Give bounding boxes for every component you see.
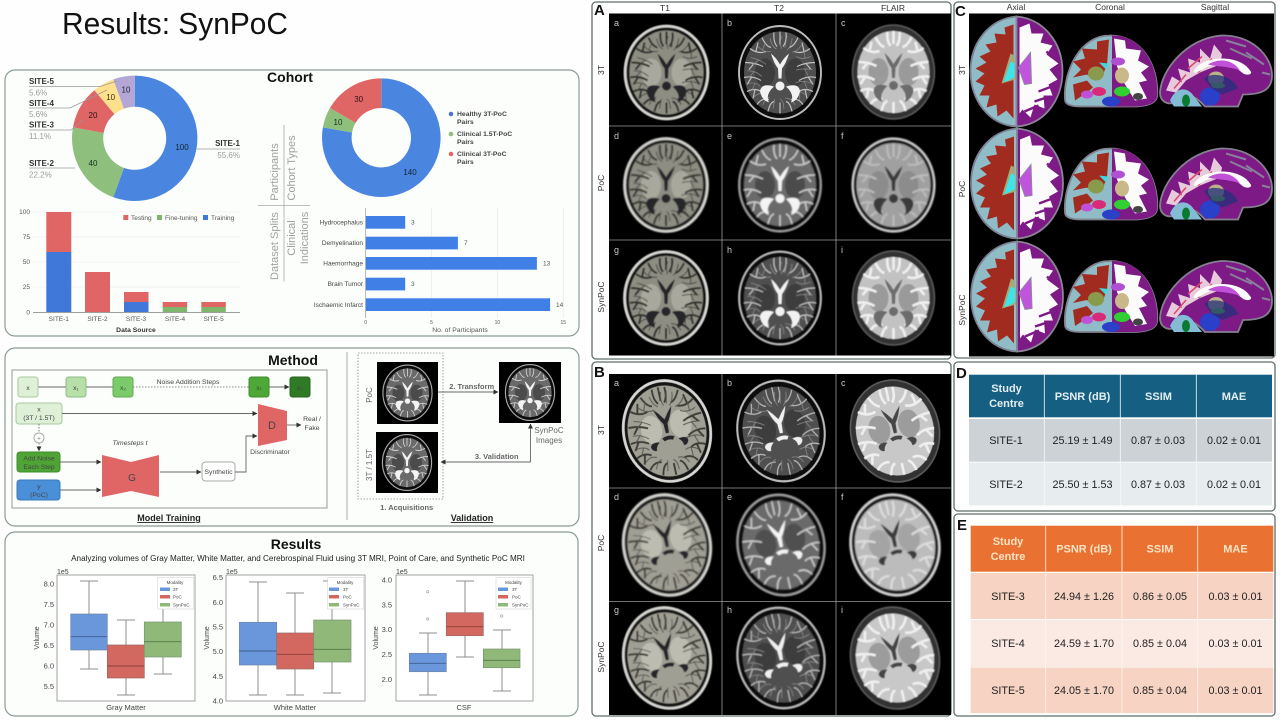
row headers xyxy=(596,425,606,673)
box plot: gray matter: Volume xyxy=(34,626,41,650)
box plot: white matter: 1e5 xyxy=(226,569,238,576)
stacked bar chart: data source: 50 xyxy=(23,259,30,266)
mri cell h: h xyxy=(727,605,732,615)
box plot: white matter: White Matter xyxy=(274,703,317,712)
generator: G xyxy=(128,473,136,484)
panel C: segmentation grid xyxy=(954,2,1275,358)
donut labels: data source: 5.6% xyxy=(29,88,47,98)
mri cell b xyxy=(727,18,821,119)
stacked bar chart: data source: SITE-4 xyxy=(165,316,185,323)
legend: Modality xyxy=(337,580,354,585)
noise addition steps: xₜ xyxy=(256,385,262,392)
stacked bar chart: data source: SITE-5 xyxy=(203,316,224,323)
row SITE-2: 0.02 ± 0.01 xyxy=(1207,479,1261,491)
column headers xyxy=(660,3,905,13)
heading: method: Method xyxy=(268,352,318,368)
mri cell h xyxy=(727,599,834,717)
row headers: SynPoC xyxy=(596,281,606,313)
legend xyxy=(328,578,364,609)
inputs: Each Step xyxy=(23,464,55,471)
box plot: white matter xyxy=(204,569,365,712)
segmentation row: 3T xyxy=(970,16,1272,126)
diagram: validation: SynPoC xyxy=(534,426,564,435)
row headers xyxy=(596,65,606,313)
row headers: 3T xyxy=(957,65,967,75)
legend: 3T xyxy=(173,587,179,592)
row headers xyxy=(957,65,967,326)
subtitle: Analyzing volumes of Gray Matter, White Matter, and Cerebrospinal Fluid using 3T MRI, Point of Care, and Synthetic PoC MRI xyxy=(71,554,525,563)
heading: model training: Model Training xyxy=(137,513,201,523)
donut chart: cohort types xyxy=(322,78,441,197)
box plot: gray matter: 7.0 xyxy=(44,620,54,630)
row SITE-3: 0.03 ± 0.01 xyxy=(1209,591,1262,603)
stacked bar chart: data source: SITE-1 xyxy=(49,316,69,323)
mri cell e xyxy=(727,131,821,232)
discriminator: Real / xyxy=(303,416,321,423)
row SITE-2 xyxy=(969,462,1272,506)
mri cell d: d xyxy=(614,131,619,141)
row headers: SynPoC xyxy=(596,641,606,673)
table header: Centre xyxy=(991,551,1025,563)
panel letter D: D xyxy=(956,365,967,382)
discriminator: Fake xyxy=(304,425,320,432)
donut labels and legend: cohort types: 30 xyxy=(354,95,364,104)
box plot: CSF: 4.0 xyxy=(382,576,392,584)
noise addition steps: x₂ xyxy=(120,385,126,392)
noise addition steps xyxy=(18,377,310,397)
table header: MAE xyxy=(1222,391,1246,403)
table header: SSIM xyxy=(1145,391,1172,403)
diagram: model training xyxy=(12,370,327,508)
inputs: y xyxy=(37,484,41,490)
mri cell f xyxy=(841,131,934,232)
inputs: (3T / 1.5T) xyxy=(23,415,55,422)
panel letter A: A xyxy=(594,2,605,19)
bar chart: clinical indications: 15 xyxy=(561,320,566,326)
bar chart: clinical indications: Brain Tumor xyxy=(328,281,364,288)
box plot: white matter: 4.5 xyxy=(213,672,223,681)
noise addition steps: x xyxy=(297,385,300,392)
panel letter C: C xyxy=(955,3,966,20)
donut labels and legend: cohort types: Pairs xyxy=(457,139,474,146)
panel letter B: B xyxy=(594,364,605,381)
side labels: participants and splits: Dataset Splits xyxy=(269,212,281,280)
box plot: white matter: 5.5 xyxy=(213,622,223,632)
panel: results xyxy=(5,532,578,716)
bar chart: clinical indications: Ischaemic Infarct xyxy=(314,302,363,309)
mri cell b xyxy=(727,372,834,490)
row SITE-2: 25.50 ± 1.53 xyxy=(1053,479,1112,491)
mri cell a: a xyxy=(614,378,619,388)
donut labels and legend: cohort types: Pairs xyxy=(457,159,474,166)
legend: PoC xyxy=(343,594,353,600)
noise addition steps: x₁ xyxy=(73,385,80,392)
table header: MAE xyxy=(1223,544,1248,556)
box plot: gray matter: Gray Matter xyxy=(106,703,146,712)
row SITE-5: 0.03 ± 0.01 xyxy=(1209,685,1262,697)
row headers: 3T xyxy=(596,425,606,435)
box plot: CSF xyxy=(373,569,533,712)
panel letter E: E xyxy=(957,517,967,534)
segmentation row: PoC xyxy=(971,128,1272,238)
bar chart: clinical indications: 5 xyxy=(430,320,433,326)
mri cell g xyxy=(614,599,720,717)
legend: splits xyxy=(123,215,235,222)
box plot: gray matter: 1e5 xyxy=(57,569,69,576)
mri cell c: c xyxy=(841,18,846,28)
legend: 3T xyxy=(343,587,349,592)
panel: cohort xyxy=(5,69,579,336)
discriminator xyxy=(62,404,321,472)
box plot: gray matter: 5.5 xyxy=(44,682,54,691)
legend: 3T xyxy=(512,587,518,592)
row headers: PoC xyxy=(957,181,967,197)
stacked bar chart: data source: 75 xyxy=(23,234,30,241)
row SITE-4: 24.59 ± 1.70 xyxy=(1054,638,1114,650)
row SITE-1 xyxy=(969,419,1272,462)
legend: splits: Testing xyxy=(131,215,152,222)
donut labels: data source: 20 xyxy=(89,111,98,120)
row SITE-1: SITE-1 xyxy=(989,435,1023,447)
panel: method xyxy=(5,348,579,526)
bar chart: clinical indications: No. of Participants xyxy=(432,327,488,334)
row SITE-2: 0.87 ± 0.03 xyxy=(1131,479,1185,491)
column headers: FLAIR xyxy=(881,3,905,13)
legend: SynPoC xyxy=(512,602,529,608)
mri cell i: i xyxy=(841,605,843,615)
donut labels: data source: 5.6% xyxy=(29,110,47,119)
row SITE-5 xyxy=(971,668,1273,713)
row headers: PoC xyxy=(596,535,606,551)
donut labels: data source: 10 xyxy=(122,86,131,94)
legend: Modality xyxy=(505,580,523,585)
box plot: CSF: Volume xyxy=(373,626,380,650)
mri cell h xyxy=(727,245,821,344)
column headers: T2 xyxy=(774,3,784,13)
box plot: gray matter: 7.5 xyxy=(44,600,54,609)
bar chart: clinical indications: 10 xyxy=(495,320,500,326)
box plot: gray matter xyxy=(34,569,195,712)
mri cell d xyxy=(614,131,708,232)
row SITE-5: 0.85 ± 0.04 xyxy=(1133,685,1187,697)
donut labels: data source: SITE-2 xyxy=(29,159,54,168)
box plot: CSF: 3.5 xyxy=(382,600,392,610)
row SITE-5: SITE-5 xyxy=(991,685,1025,697)
donut labels and legend: cohort types xyxy=(334,95,512,177)
bar chart: clinical indications: 7 xyxy=(464,240,468,247)
side labels: participants and splits: Participants xyxy=(269,143,281,201)
legend: splits: Training xyxy=(211,215,235,222)
donut labels: data source: 40 xyxy=(89,159,98,168)
mri cell c xyxy=(841,18,934,119)
table header xyxy=(969,375,1272,417)
row SITE-4 xyxy=(971,620,1273,667)
donut labels: data source: SITE-1 xyxy=(215,139,241,148)
stacked bar chart: data source: SITE-2 xyxy=(87,316,108,323)
box plot: CSF: 1e5 xyxy=(396,569,408,576)
bar chart: clinical indications: 3 xyxy=(411,220,415,226)
bar chart: clinical indications: Haemorrhage xyxy=(323,260,363,268)
donut labels: data source: SITE-3 xyxy=(29,120,54,130)
legend: Modality xyxy=(167,580,184,585)
donut labels and legend: cohort types: 140 xyxy=(403,168,417,177)
box plot: white matter: 6.5 xyxy=(213,573,223,582)
diagram: validation: 3T / 1.5T xyxy=(365,449,374,481)
mri cell i xyxy=(841,599,949,717)
mri cell d: d xyxy=(614,492,619,502)
table header: PSNR (dB) xyxy=(1055,391,1111,403)
mri cell c xyxy=(841,372,949,490)
column headers xyxy=(1007,2,1229,12)
row SITE-1: 0.02 ± 0.01 xyxy=(1207,435,1261,447)
inputs: x xyxy=(37,406,41,414)
box plot: gray matter: 8.0 xyxy=(44,580,54,588)
side labels: participants and splits xyxy=(258,125,311,282)
box plot: CSF: 3.0 xyxy=(382,625,392,634)
row SITE-5: 24.05 ± 1.70 xyxy=(1054,685,1114,697)
row SITE-1: 25.19 ± 1.49 xyxy=(1053,435,1112,447)
table header: Study xyxy=(993,536,1024,548)
diagram: validation: Images xyxy=(536,436,562,445)
row headers: PoC xyxy=(596,175,606,191)
legend: SynPoC xyxy=(343,602,360,608)
box plot: CSF: 2.0 xyxy=(382,675,392,684)
bar chart: clinical indications: 14 xyxy=(556,302,564,309)
diagram: validation: 3. Validation xyxy=(475,452,519,461)
donut labels: data source: 10 xyxy=(106,93,116,102)
box plot: white matter: 5.0 xyxy=(213,647,223,656)
legend: splits: Fine-tuning xyxy=(165,215,198,222)
row SITE-3: 24.94 ± 1.26 xyxy=(1054,591,1114,603)
column headers: Coronal xyxy=(1095,2,1125,12)
box plot: CSF: CSF xyxy=(456,703,472,712)
mri cell i: i xyxy=(841,245,843,255)
mri cell f: f xyxy=(841,131,844,141)
diagram: validation: 1. Acquisitions xyxy=(380,503,433,512)
diagram: validation xyxy=(358,353,564,512)
table header xyxy=(971,526,1273,572)
mri cell g xyxy=(614,245,708,344)
diagram: validation: PoC xyxy=(365,387,374,403)
row headers: SynPoC xyxy=(957,294,967,326)
mri cell c: c xyxy=(841,378,846,388)
donut labels and legend: cohort types: Clinical 1.5T-PoC xyxy=(457,131,512,138)
bar chart: clinical indications xyxy=(314,208,566,334)
legend: PoC xyxy=(512,594,522,600)
mri cell a: a xyxy=(614,18,619,28)
donut labels: data source: 11.1% xyxy=(29,132,51,141)
generator: Timesteps t xyxy=(112,440,149,447)
box plot: white matter: 6.0 xyxy=(213,598,223,607)
noise addition steps: x xyxy=(26,385,30,392)
legend: SynPoC xyxy=(173,602,190,608)
table header: PSNR (dB) xyxy=(1056,544,1112,556)
donut labels: data source: 100 xyxy=(175,143,189,152)
stacked bar chart: data source xyxy=(19,209,240,334)
row SITE-1: 0.87 ± 0.03 xyxy=(1131,435,1185,447)
bar chart: clinical indications: Demyelination xyxy=(322,240,363,247)
segmentation row: SynPoC xyxy=(971,242,1272,352)
generator xyxy=(60,440,235,497)
panel B: external dataset MRI grid xyxy=(592,362,951,717)
stacked bar chart: data source: Data Source xyxy=(116,327,156,334)
inputs xyxy=(16,403,62,500)
row SITE-3 xyxy=(971,573,1273,619)
heading: validation: Validation xyxy=(451,513,493,523)
mri cell e: e xyxy=(727,131,732,141)
donut labels: data source xyxy=(29,77,241,180)
donut chart: data source xyxy=(72,76,197,201)
box plot: white matter: Volume xyxy=(204,626,211,650)
mri cell b: b xyxy=(727,378,732,388)
row SITE-4: SITE-4 xyxy=(991,638,1025,650)
heading: cohort: Cohort xyxy=(267,69,313,85)
stacked bar chart: data source: 25 xyxy=(23,284,30,291)
noise addition steps: T xyxy=(300,387,303,392)
mri cell i xyxy=(841,245,934,345)
mri cell g: g xyxy=(614,605,619,615)
row SITE-2: SITE-2 xyxy=(989,479,1023,491)
mri cell d xyxy=(614,486,720,604)
legend xyxy=(496,578,531,609)
donut labels and legend: cohort types: Pairs xyxy=(457,119,474,126)
mri cell b: b xyxy=(727,18,732,28)
bar chart: clinical indications: 0 xyxy=(364,320,367,326)
mri cell e xyxy=(727,486,834,604)
mri cell a xyxy=(614,18,708,119)
stacked bar chart: data source: SITE-3 xyxy=(126,316,146,323)
diagram: validation: 2. Transform xyxy=(449,382,495,391)
bar chart: clinical indications: 13 xyxy=(543,260,551,268)
panel A: internal dataset MRI grid xyxy=(592,2,951,359)
column headers: Sagittal xyxy=(1201,2,1229,12)
mri cell f: f xyxy=(841,492,844,502)
heading: results: Results xyxy=(271,536,321,552)
donut labels: data source: SITE-4 xyxy=(29,99,54,108)
row SITE-4: 0.03 ± 0.01 xyxy=(1209,638,1262,650)
table header: Study xyxy=(991,383,1023,395)
column headers: T1 xyxy=(660,3,670,13)
box plot: gray matter: 6.5 xyxy=(44,641,54,650)
discriminator: D xyxy=(268,420,276,432)
inputs: (PoC) xyxy=(30,492,48,499)
generator: Synthetic xyxy=(205,469,233,476)
row SITE-3: 0.86 ± 0.05 xyxy=(1133,591,1187,603)
donut labels: data source: 22.2% xyxy=(29,170,52,180)
legend: PoC xyxy=(173,594,183,600)
legend xyxy=(158,578,194,609)
donut labels and legend: cohort types: 10 xyxy=(334,118,343,127)
donut labels: data source: SITE-5 xyxy=(29,77,54,86)
donut labels and legend: cohort types: Healthy 3T-PoC xyxy=(457,111,507,118)
box plot: CSF: 2.5 xyxy=(382,650,392,659)
mri cell h: h xyxy=(727,245,732,255)
discriminator: Discriminator xyxy=(250,449,291,456)
box plot: gray matter: 6.0 xyxy=(44,662,54,670)
panel D: metrics table sites 1-2 xyxy=(954,362,1275,511)
bar chart: clinical indications: Hydrocephalus xyxy=(320,220,364,226)
row SITE-3: SITE-3 xyxy=(991,591,1025,603)
stacked bar chart: data source: 0 xyxy=(26,310,30,316)
table header: Centre xyxy=(989,398,1024,410)
mri cell a xyxy=(614,372,720,490)
side labels: participants and splits: Clinical xyxy=(286,220,298,256)
stacked bar chart: data source: 100 xyxy=(19,209,30,216)
table header: SSIM xyxy=(1147,544,1173,556)
mri cell f xyxy=(841,486,949,604)
panel E: metrics table sites 3-5 xyxy=(954,514,1275,716)
inputs: Add Noise xyxy=(23,456,55,462)
side labels: participants and splits: Indications xyxy=(299,211,311,264)
mri cell g: g xyxy=(614,245,619,255)
title: Results: SynPoC xyxy=(62,6,288,41)
bar chart: clinical indications: 3 xyxy=(411,281,415,288)
row SITE-4: 0.85 ± 0.04 xyxy=(1133,638,1187,650)
box plot: white matter: 4.0 xyxy=(213,696,223,706)
row headers: 3T xyxy=(596,65,606,75)
column headers: Axial xyxy=(1007,2,1025,12)
mri cell e: e xyxy=(727,492,732,502)
noise addition steps: Noise Addition Steps xyxy=(157,379,220,386)
donut labels: data source: 55.6% xyxy=(217,151,240,160)
side labels: participants and splits: Cohort Types xyxy=(286,135,298,201)
donut labels and legend: cohort types: Clinical 3T-PoC xyxy=(457,151,507,158)
inputs: + xyxy=(37,436,41,442)
